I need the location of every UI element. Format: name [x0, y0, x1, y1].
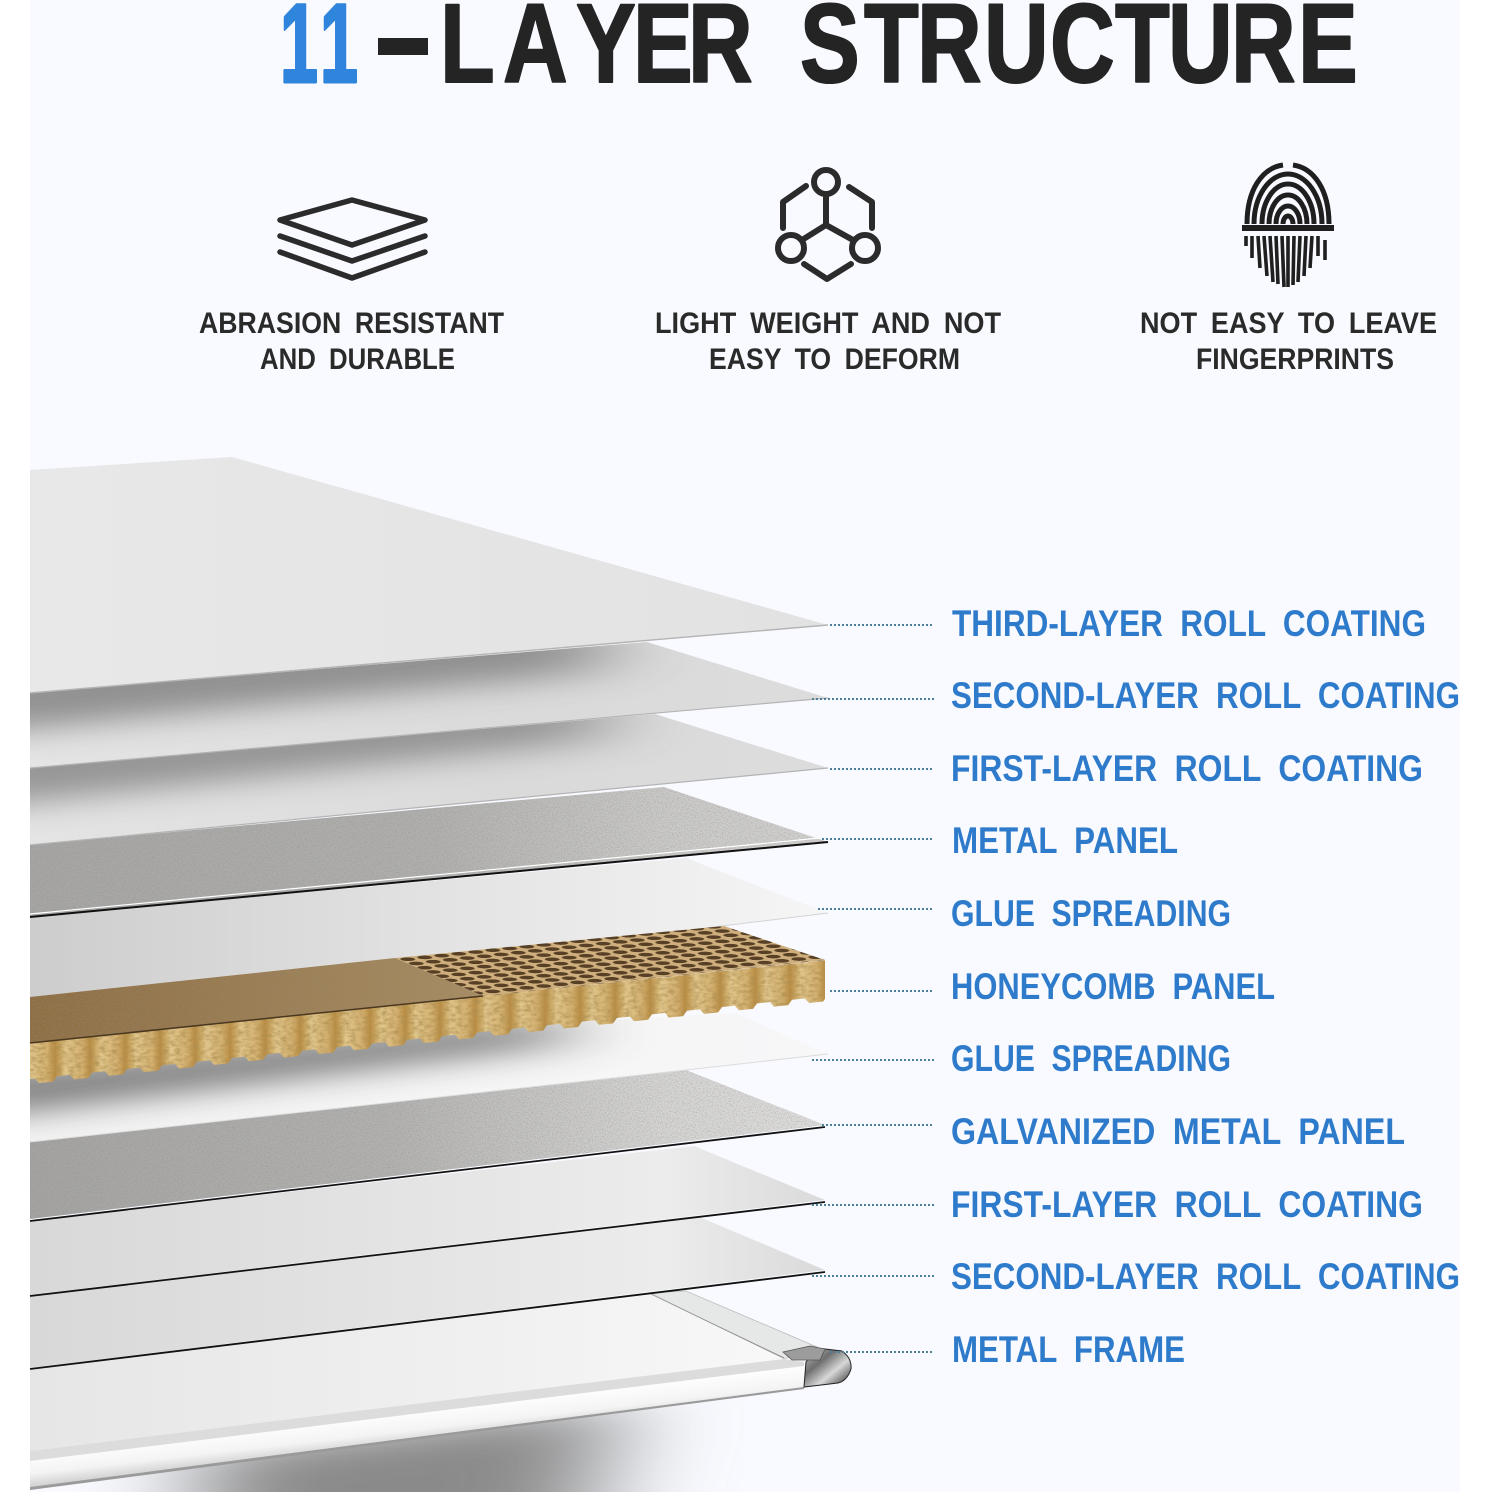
layer: first-layer roll coating (lower)	[30, 1146, 825, 1296]
layer: second-layer roll coating (upper)	[30, 642, 828, 768]
caption: NOT EASY TO LEAVE	[1140, 307, 1437, 340]
kraft paper skin	[30, 958, 483, 1043]
leader lines	[812, 625, 934, 1352]
layer: metal frame	[30, 1291, 851, 1492]
caption	[199, 307, 504, 376]
caption	[1140, 307, 1437, 376]
layer labels: GALVANIZED METAL PANEL	[951, 1111, 1405, 1152]
title	[280, 0, 1358, 106]
layer labels: FIRST-LAYER ROLL COATING	[951, 748, 1423, 789]
icon: stacked layers	[280, 200, 425, 278]
exploded panel layers	[0, 457, 851, 1492]
layer labels: METAL FRAME	[952, 1329, 1185, 1370]
layer labels: GLUE SPREADING	[951, 893, 1231, 934]
layer: first-layer roll coating (upper)	[30, 714, 828, 846]
feature: fingerprints	[1140, 165, 1437, 376]
layer: galvanized metal panel	[30, 1070, 825, 1221]
layer: second-layer roll coating (lower)	[30, 1216, 825, 1369]
honeycomb top cells	[395, 926, 825, 996]
layer: metal panel	[30, 787, 828, 917]
icon: fingerprint	[1242, 165, 1334, 287]
layer labels: HONEYCOMB PANEL	[951, 966, 1275, 1007]
layer labels: THIRD-LAYER ROLL COATING	[952, 603, 1426, 644]
layer: honeycomb panel	[30, 926, 825, 1086]
layer labels	[951, 603, 1460, 1370]
feature: abrasion resistant	[199, 200, 504, 376]
layer: glue spreading (upper)	[30, 858, 828, 1010]
layer labels: FIRST-LAYER ROLL COATING	[951, 1184, 1423, 1225]
layer labels: GLUE SPREADING	[951, 1038, 1231, 1079]
caption	[655, 307, 1001, 376]
layer: third-layer roll coating	[30, 457, 828, 693]
caption: EASY TO DEFORM	[709, 343, 960, 376]
icon: molecule hexagon	[778, 170, 878, 279]
layer: glue spreading (lower)	[0, 1013, 828, 1142]
caption: AND DURABLE	[260, 343, 455, 376]
honeycomb side wall	[30, 960, 825, 1086]
caption: LIGHT WEIGHT AND NOT	[655, 307, 1001, 340]
feature: light weight	[655, 170, 1001, 376]
layer labels: METAL PANEL	[952, 820, 1178, 861]
caption: ABRASION RESISTANT	[199, 307, 504, 340]
caption: FINGERPRINTS	[1196, 343, 1394, 376]
